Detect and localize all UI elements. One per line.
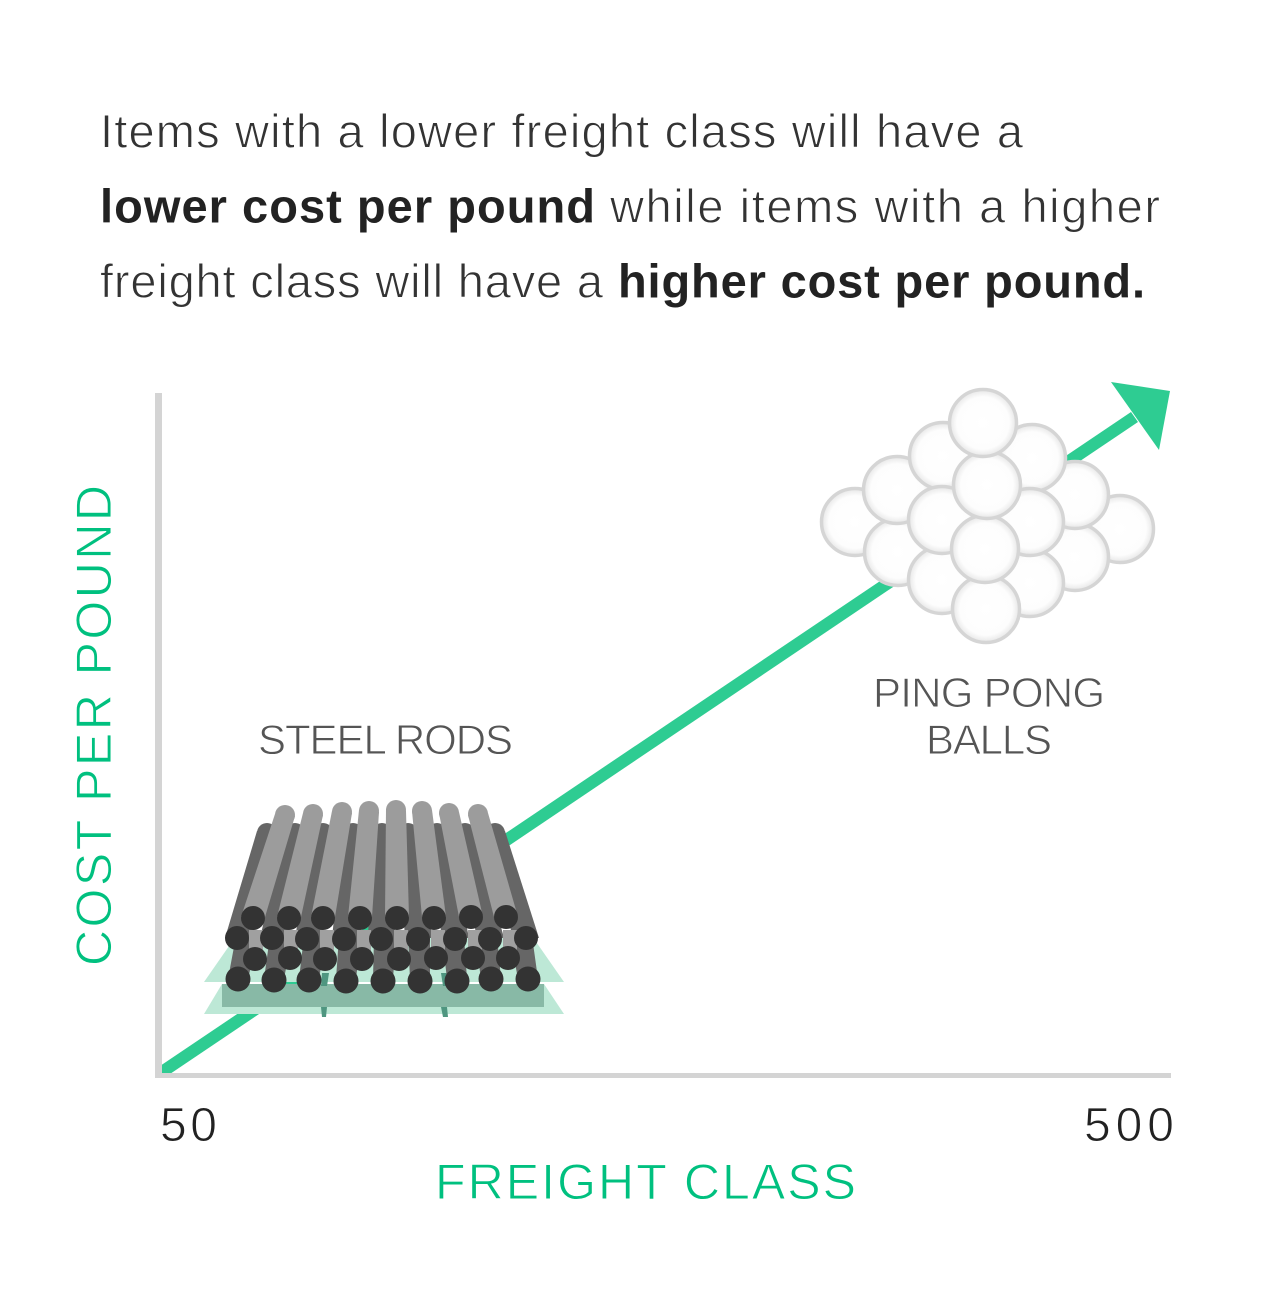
label: ping pong balls: BALLS <box>926 716 1052 763</box>
front rods <box>241 800 518 917</box>
arrow: rising cost line <box>160 382 1170 1076</box>
lower rods <box>228 936 538 979</box>
icon: ping pong balls <box>822 390 1154 642</box>
chart axes <box>155 393 1171 1078</box>
y axis label: COST PER POUND <box>66 485 122 966</box>
label: ping pong balls: PING PONG <box>873 669 1105 716</box>
label: ping pong balls <box>873 669 1105 763</box>
x axis min value: 50 <box>160 1099 217 1152</box>
intro text: while items with a higher <box>609 180 1160 232</box>
label: steel rods: STEEL RODS <box>258 716 513 763</box>
rod ends <box>225 905 540 994</box>
x axis label: FREIGHT CLASS <box>435 1154 856 1210</box>
intro text: lower cost per pound <box>100 180 595 232</box>
icon: steel rods on pallet <box>204 800 564 1017</box>
intro text <box>100 104 1160 308</box>
x axis max value: 500 <box>1084 1099 1174 1152</box>
intro text: Items with a lower freight class will have a <box>100 104 1024 158</box>
intro text: higher cost per pound. <box>618 254 1145 308</box>
light gaps between rod ends <box>249 930 517 952</box>
intro text: freight class will have a <box>100 254 604 308</box>
back rods <box>225 823 539 938</box>
